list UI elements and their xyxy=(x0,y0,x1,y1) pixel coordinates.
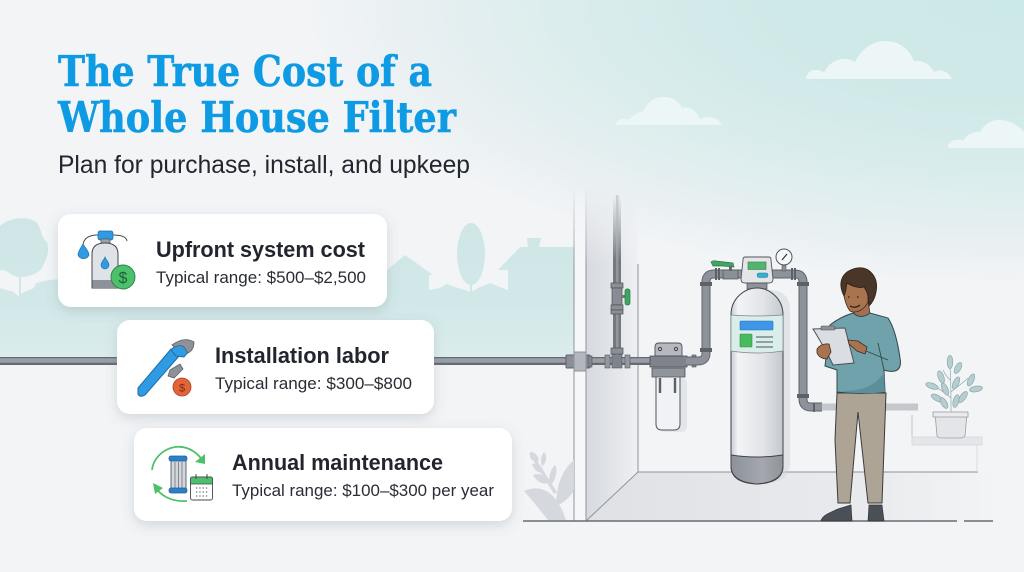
title xyxy=(57,47,457,143)
panel: installation labor xyxy=(117,320,434,414)
panel: upfront system cost: Upfront system cost xyxy=(156,237,365,262)
trousers xyxy=(835,393,886,503)
leaves xyxy=(925,356,983,412)
shoes xyxy=(821,505,884,521)
panel: upfront system cost xyxy=(58,214,387,307)
icon: wrench with coin xyxy=(138,340,194,396)
panel: annual maintenance: Typical range: $100–$300 per year xyxy=(232,481,494,500)
main supply pipe xyxy=(0,352,700,371)
green ball valve xyxy=(711,261,738,279)
icon: tank with dollar coin xyxy=(78,231,135,289)
panel: annual maintenance xyxy=(134,428,512,521)
filter tank xyxy=(731,249,792,484)
title: The True Cost of a xyxy=(58,47,432,97)
small plant left of wall xyxy=(524,452,578,520)
clipboard xyxy=(813,326,854,365)
icon: tank with dollar coin: $ xyxy=(119,270,128,287)
panel: annual maintenance: Annual maintenance xyxy=(232,450,443,475)
connecting pipes around tank xyxy=(686,268,918,412)
room walls and floor xyxy=(574,190,1000,521)
clouds xyxy=(616,41,1024,148)
person with clipboard xyxy=(813,268,900,521)
sweater xyxy=(825,313,900,394)
vertical pipe with green valve xyxy=(611,195,630,355)
panel: installation labor: Installation labor xyxy=(215,343,389,368)
control head xyxy=(741,257,773,283)
face details xyxy=(848,297,860,307)
pressure gauge xyxy=(776,249,792,271)
icon: filter cycle and calendar xyxy=(152,447,212,501)
panel: upfront system cost: Typical range: $500–$2,500 xyxy=(156,268,366,287)
background landscape xyxy=(0,218,574,357)
hands xyxy=(817,340,867,359)
title: Whole House Filter xyxy=(57,93,457,143)
icon: wrench with coin: $ xyxy=(179,382,185,394)
head xyxy=(843,279,868,312)
small shelf with potted plant xyxy=(912,356,983,472)
panel: installation labor: Typical range: $300–$800 xyxy=(215,374,412,393)
ground line xyxy=(523,520,993,522)
pre-filter housing xyxy=(650,343,696,432)
subtitle: Plan for purchase, install, and upkeep xyxy=(58,151,470,179)
neck xyxy=(853,300,870,318)
hair xyxy=(841,268,877,306)
pot xyxy=(933,412,968,438)
